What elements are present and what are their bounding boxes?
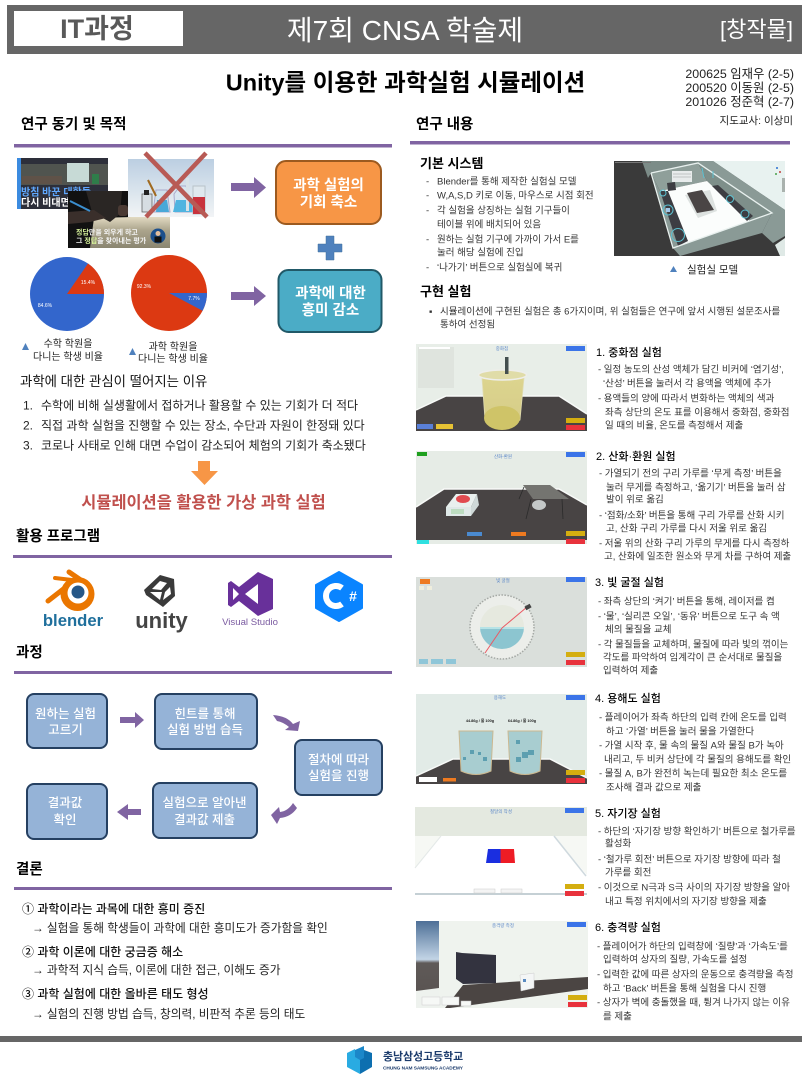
screenshot: oxidation-reduction <box>416 451 587 544</box>
step: choose experiment <box>27 694 107 748</box>
text block: implemented experiments: 구현 실험 <box>420 284 471 299</box>
logo: unity: unity <box>135 608 189 633</box>
heading: conclusion: 결론 <box>16 861 43 878</box>
panel: research content <box>410 116 796 1022</box>
screenshot: neutralization: 중화점 <box>496 345 508 352</box>
conclusion item 3 <box>22 986 305 1021</box>
arrow: step 2 to 3 <box>273 715 300 731</box>
description: solubility: 4. 용해도 실험 <box>595 691 661 705</box>
conclusion item 1: → 실험을 통해 학생들이 과학에 대한 흥미도가 증가함을 확인 <box>32 921 328 935</box>
panel: process <box>14 644 392 839</box>
conclusion item 2 <box>22 944 281 977</box>
icon: plus <box>318 236 342 260</box>
description: oxidation-reduction: - 가열되기 전의 구리 가루를 ‘무게 측정’ 버튼을 <box>599 468 782 480</box>
logo: blender <box>43 572 104 630</box>
caption: science academy chart: 과학 학원을 <box>149 341 197 353</box>
pie chart: science academy: 92.3% <box>137 284 152 290</box>
experiment 6: impulse <box>416 920 793 1022</box>
screenshot: solubility: 용해도 <box>494 694 506 701</box>
text block: basic system: W,A,S,D 키로 이동, 마우스로 시점 회전 <box>437 190 594 202</box>
conclusion item 1 <box>22 901 328 935</box>
caption: math academy chart: 다니는 학생 비율 <box>33 351 103 363</box>
text block: basic system: - <box>426 206 429 216</box>
text block: basic system: - <box>426 234 429 246</box>
arrow: step 1 to 2 <box>120 712 144 728</box>
caption: science academy chart: 다니는 학생 비율 <box>138 353 208 365</box>
description: impulse: 하고 ‘Back’ 버튼을 통해 실험을 다시 진행 <box>603 982 766 994</box>
text block: reasons for falling interest: 2. <box>23 418 33 432</box>
description: light refraction: - 좌측 상단의 ‘켜기’ 버튼을 통해, 레이저를 켬 <box>598 596 775 608</box>
icon: red cross <box>145 153 207 217</box>
text block: reasons for falling interest: 1. <box>23 398 33 412</box>
text block: basic system: 테이블 위에 배치되어 있음 <box>437 218 541 230</box>
logo: blender: blender <box>43 611 104 630</box>
screenshot: magnetic field <box>415 807 587 896</box>
box: reduced opportunity: 과학 실험의 <box>293 177 364 194</box>
box: decreased interest <box>278 270 382 332</box>
description: solubility <box>595 691 791 794</box>
step: submit result <box>153 783 257 838</box>
caption: lab model: 실험실 모델 <box>687 264 738 276</box>
description: magnetic field: 가루를 회전 <box>605 868 651 878</box>
heading: motivation: 연구 동기 및 목적 <box>21 116 126 133</box>
experiment 2: oxidation-reduction <box>416 449 791 562</box>
description: impulse: - 상자가 벽에 충돌했을 때, 튕겨 나가지 않는 이유 <box>597 996 790 1008</box>
description: light refraction <box>595 575 789 676</box>
experiment 1: neutralization <box>416 344 790 432</box>
text block: implemented experiments <box>420 284 780 330</box>
text block: basic system: 눌러 해당 실험에 진입 <box>437 246 524 258</box>
description: light refraction: - 각 물질들을 교체하며, 물질에 따라 빛의 꺾이는 <box>598 638 789 650</box>
description: impulse: 6. 충격량 실험 <box>595 920 661 934</box>
description: light refraction: 각도를 파악하여 임계각이 큰 순서대로 물질을 <box>603 652 783 664</box>
description: solubility: - 플레이어가 좌측 하단의 입력 칸에 온도를 입력 <box>599 712 787 724</box>
text block: basic system: - <box>426 190 429 202</box>
step: check result: 확인 <box>53 813 77 827</box>
authors: 200625 임재우 (2-5) <box>685 67 794 81</box>
step: run experiment: 실험을 진행 <box>308 768 369 783</box>
conclusion item 3: → 실험의 진행 방법 습득, 창의력, 비판적 추론 등의 태도 <box>32 1008 305 1021</box>
text block: reasons for falling interest <box>20 374 366 452</box>
authors <box>685 67 794 109</box>
text block: implemented experiments: 통하여 선정됨 <box>440 318 495 330</box>
text block: implemented experiments: 시뮬레이션에 구현된 실험은 총 6가지이며, 위 실험들은 연구에 앞서 시행된 설문조사를 <box>440 306 780 318</box>
description: impulse: - 입력한 값에 따른 상자의 운동으로 충격량을 측정 <box>597 968 793 980</box>
text block: reasons for falling interest: 코로나 사태로 인해 대면 수업이 감소되어 체험의 기회가 축소됐다 <box>41 438 366 452</box>
text block: basic system <box>420 156 594 274</box>
description: oxidation-reduction: - ‘점화/소화’ 버튼을 통해 구리 가루를 산화 시키 <box>599 510 784 522</box>
description: oxidation-reduction: 눌러 무게를 측정하고, ‘옮기기’ 버튼을 눌러 삼 <box>606 482 786 494</box>
school name: CHUNG NAM SAMSUNG ACADEMY <box>383 1066 464 1072</box>
step: check result <box>27 784 107 839</box>
heading: research content <box>410 116 790 144</box>
description: magnetic field <box>595 806 796 908</box>
box: decreased interest: 과학에 대한 <box>295 285 366 302</box>
text block: basic system: 원하는 실험 기구에 가까이 가서 E를 <box>437 234 579 246</box>
pie chart: math academy <box>30 257 104 331</box>
conclusion item 2: ② 과학 이론에 대한 궁금증 해소 <box>22 944 183 959</box>
pie chart: math academy: 15.4% <box>81 280 96 286</box>
arrow: to reduced opportunity <box>231 177 266 198</box>
screenshot: oxidation-reduction: 산화-환원 <box>494 453 512 460</box>
photo: crossed-out lab glassware <box>128 153 214 217</box>
description: oxidation-reduction <box>596 449 791 562</box>
heading: research content: 연구 내용 <box>416 116 473 133</box>
description: neutralization: 1. 중화점 실험 <box>596 345 662 359</box>
authors: 200520 이동원 (2-5) <box>685 81 794 95</box>
badge: IT course: IT과정 <box>60 14 134 44</box>
step: submit result: 결과값 제출 <box>174 813 235 827</box>
description: magnetic field: 활성화 <box>605 838 631 850</box>
description: magnetic field: - 이것으로 N극과 S극 사이의 자기장 방향을 알아 <box>598 882 790 894</box>
heading: programs: 활용 프로그램 <box>16 528 100 545</box>
description: oxidation-reduction: 발이 위로 옮김 <box>606 494 664 506</box>
description: impulse: 입력하여 상자의 질량, 가속도를 설정 <box>603 954 747 966</box>
description: solubility: 조사해 결과 값으로 제출 <box>606 782 702 794</box>
footer <box>0 1036 802 1074</box>
description: magnetic field: - 하단의 ‘자기장 방향 확인하기’ 버튼으로 철가루를 <box>598 826 796 838</box>
screenshot: impulse: 충격량 측정 <box>492 922 514 929</box>
text block: reasons for falling interest: 과학에 대한 관심이 떨어지는 이유 <box>20 374 207 389</box>
step: run experiment <box>295 740 382 795</box>
description: light refraction: 입력하여 제출 <box>603 664 658 676</box>
description: solubility: 내리고, 두 비커 상단에 각 물질의 용해도를 확인 <box>604 754 791 766</box>
arrow: to decreased interest <box>231 286 266 306</box>
box: decreased interest: 흥미 감소 <box>302 302 359 319</box>
description: light refraction: 3. 빛 굴절 실험 <box>595 575 664 589</box>
experiment 3: light refraction <box>416 575 789 676</box>
description: magnetic field: 5. 자기장 실험 <box>595 806 661 820</box>
step: learn method via hints <box>155 694 257 749</box>
experiment 4: solubility <box>416 691 791 794</box>
text block: reasons for falling interest: 수학에 비해 실생활에서 접하거나 활용할 수 있는 기회가 더 적다 <box>41 398 358 412</box>
logo: visual studio: Visual Studio <box>222 617 278 628</box>
conclusion item 3: ③ 과학 실험에 대한 올바른 태도 형성 <box>22 986 209 1001</box>
header banner <box>7 5 802 54</box>
step: run experiment: 절차에 따라 <box>308 753 369 767</box>
heading: process: 과정 <box>16 644 43 661</box>
advisor: 지도교사: 이상미 <box>720 115 793 127</box>
description: oxidation-reduction: 고, 산화에 일조한 원소와 무게 차를 구하여 제출 <box>604 550 791 562</box>
heading: programs <box>13 528 392 558</box>
description: oxidation-reduction: 2. 산화·환원 실험 <box>596 449 676 463</box>
pie chart: science academy: 7.7% <box>188 296 200 302</box>
poster title: Unity를 이용한 과학실험 시뮬레이션 <box>226 70 585 96</box>
description: impulse: - 플레이어가 하단의 입력창에 ‘질량’과 ‘가속도’를 <box>597 940 788 952</box>
screenshot: solubility: 64.86g / 물 100g <box>508 718 537 723</box>
description: oxidation-reduction: 고, 산화 구리 가루를 다시 저울 위로 옮김 <box>606 522 767 534</box>
screenshot: neutralization <box>416 344 587 431</box>
box: reduced opportunity: 기회 축소 <box>300 194 357 211</box>
pie chart: science academy <box>131 255 207 331</box>
description: oxidation-reduction: - 저울 위의 산화 구리 가루의 무게를 다시 측정하 <box>599 538 790 550</box>
text block: basic system: - <box>426 262 429 274</box>
photo: news capture: 다시 비대면으로 <box>21 196 88 209</box>
logo: c sharp <box>316 572 362 621</box>
pie chart: math academy: 84.6% <box>38 303 53 309</box>
photo: news capture <box>17 158 108 209</box>
screenshot: light refraction: 빛 굴절 <box>496 577 510 584</box>
photo: test taking: 그 정답을 찾아내는 평가 <box>76 236 147 245</box>
panel: research motivation and purpose <box>14 116 392 512</box>
text block: reasons for falling interest: 직접 과학 실험을 진행할 수 있는 장소, 수단과 자원이 한정돼 있다 <box>41 418 365 432</box>
screenshot: impulse <box>416 921 588 1008</box>
description: neutralization: ‘산성’ 버튼을 눌러서 각 용액을 액체에 추가 <box>603 378 772 390</box>
photo: test taking <box>68 191 170 248</box>
description: light refraction: 체의 물질을 교체 <box>605 624 671 636</box>
description: solubility: - 물질 A, B가 완전히 녹는데 필요한 최소 온도를 <box>599 768 787 780</box>
arrow: down to solution <box>191 461 218 485</box>
panel: conclusion <box>14 861 392 1021</box>
text block: basic system: 기본 시스템 <box>420 156 483 171</box>
school name: 충남삼성고등학교 <box>383 1049 463 1063</box>
heading: motivation <box>14 116 392 148</box>
panel: programs used <box>13 528 392 633</box>
step: choose experiment: 고르기 <box>48 723 83 737</box>
step: learn method via hints: 힌트를 통해 <box>175 707 235 721</box>
step: choose experiment: 원하는 실험 <box>35 706 96 721</box>
photo: news capture: 방침 바꾼 대학들 <box>21 186 91 198</box>
description: solubility: - 가열 시작 후, 물 속의 물질 A와 물질 B가 녹아 <box>599 740 784 752</box>
logo: school mark <box>347 1046 372 1074</box>
image: lab model <box>614 161 785 256</box>
school name <box>383 1049 464 1072</box>
text block: basic system: - <box>426 176 429 188</box>
text block: implemented experiments: ▪ <box>429 306 432 318</box>
step: learn method via hints: 실험 방법 습득 <box>167 722 243 737</box>
arrow: step 4 to 5 <box>117 804 141 820</box>
description: light refraction: - ‘물’, ‘실리콘 오일’, ‘동유’ 버튼으로 도구 속 액 <box>598 610 780 622</box>
description: impulse: 를 제출 <box>603 1012 632 1022</box>
event title: 제7회 CNSA 학술제 <box>287 15 523 46</box>
description: neutralization: 좌측 상단의 온도 표를 이용해서 중화점, 중화점 <box>605 406 790 418</box>
description: neutralization <box>596 345 790 432</box>
conclusion item 1: ① 과학이라는 과목에 대한 흥미 증진 <box>22 901 205 916</box>
heading: conclusion <box>14 861 392 890</box>
description: neutralization: - 용액들의 양에 따라서 변화하는 액체의 색과 <box>598 392 775 404</box>
caption: math academy chart: 수학 학원을 <box>44 338 92 350</box>
screenshot: solubility <box>416 694 587 784</box>
experiment 5: magnetic field <box>415 806 796 908</box>
screenshot: magnetic field: 철달의 작성 <box>490 808 512 815</box>
category label: [창작물] <box>720 17 793 42</box>
description: impulse <box>595 920 793 1022</box>
badge: IT course <box>14 11 183 46</box>
step: check result: 결과값 <box>48 796 83 810</box>
step: submit result: 실험으로 알아낸 <box>163 795 246 810</box>
description: magnetic field: - ‘철가루 회전’ 버튼으로 자기장 방향에 따라 철 <box>598 854 781 866</box>
screenshot: solubility: 44.86g / 물 100g <box>466 718 495 723</box>
solution statement: 시뮬레이션을 활용한 가상 과학 실험 <box>81 494 326 512</box>
screenshot: light refraction <box>416 577 587 667</box>
text block: reasons for falling interest: 3. <box>23 438 33 452</box>
description: neutralization: - 일정 농도의 산성 액체가 담긴 비커에 ‘염기성’, <box>598 364 784 376</box>
logo: unity <box>135 575 189 633</box>
text block: basic system: 각 실험을 상징하는 실험 기구들이 <box>437 204 570 216</box>
heading: process <box>14 644 392 674</box>
text block: basic system: Blender를 통해 제작한 실험실 모델 <box>437 176 577 188</box>
description: magnetic field: 내고 특정 위치에서의 자기장 방향을 제출 <box>605 896 767 908</box>
caption: science academy chart <box>129 341 208 365</box>
authors: 201026 정준혁 (2-7) <box>685 95 794 109</box>
photo: test taking: 정답만을 외우게 하고 <box>76 228 138 236</box>
caption: math academy chart <box>22 338 103 363</box>
arrow: step 3 to 4 <box>271 803 297 824</box>
text block: basic system: ‘나가기’ 버튼으로 실험실에 복귀 <box>437 262 562 274</box>
description: neutralization: 일 때의 비율, 온도를 측정해서 제출 <box>605 420 743 432</box>
conclusion item 2: → 과학적 지식 습득, 이론에 대한 접근, 이해도 증가 <box>32 964 281 977</box>
box: reduced opportunity <box>276 161 381 224</box>
logo: c sharp: # <box>349 588 357 604</box>
description: solubility: 하고 ‘가열’ 버튼을 눌러 물을 가열한다 <box>606 726 754 738</box>
logo: visual studio <box>222 572 278 628</box>
